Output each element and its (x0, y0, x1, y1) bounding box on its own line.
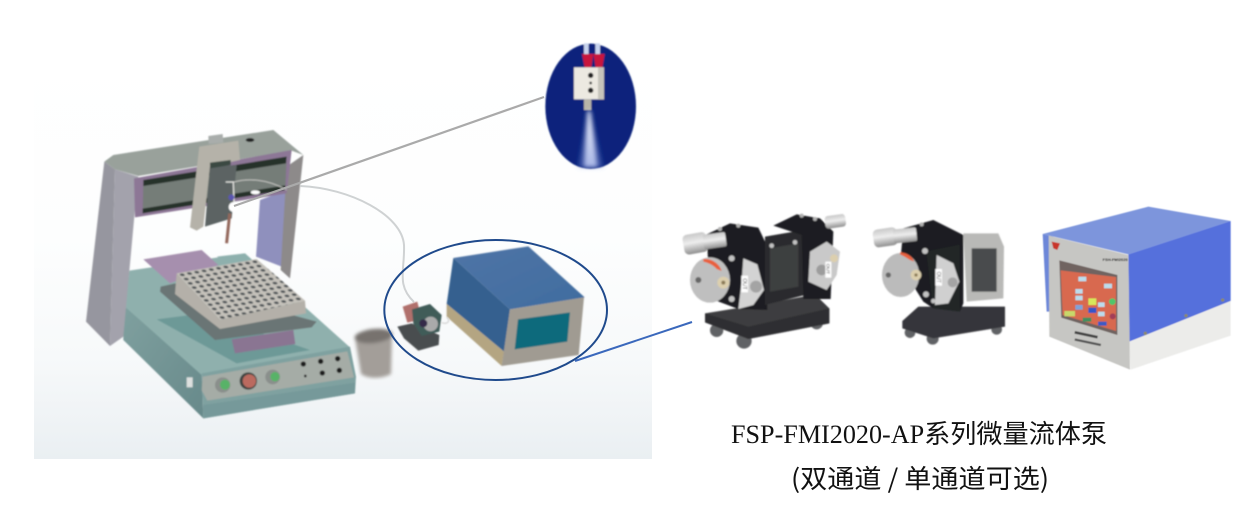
pump head left (690, 257, 764, 309)
waste cup (354, 327, 393, 378)
red fittings (582, 54, 605, 67)
dual channel pump (682, 214, 846, 349)
caption line 2: (双通道 / 单通道可选) (791, 459, 1049, 496)
pump and controller oval callout (384, 240, 607, 380)
valve body (574, 67, 604, 110)
control buttons (187, 356, 342, 393)
side screws (1144, 298, 1224, 335)
micrometer handle (872, 227, 917, 248)
pump base (902, 307, 1005, 345)
small pump (397, 302, 449, 351)
controller unit (1043, 207, 1231, 370)
work plate (160, 259, 317, 340)
leader line to nozzle detail (234, 97, 544, 206)
purple stage (143, 250, 295, 353)
controller front panel: FSH-FMI2020 (1103, 257, 1128, 262)
controller top and side (1043, 207, 1231, 370)
single channel pump (872, 220, 1005, 345)
dispensing head carriage (190, 134, 287, 243)
controller box (447, 246, 585, 366)
pump body (900, 220, 963, 312)
caption line 1: FSP-FMI2020-AP系列微量流体泵 (731, 420, 1107, 449)
nozzle detail oval (545, 43, 636, 169)
air tubes (584, 43, 600, 55)
pump head right (808, 242, 840, 290)
spray cone (578, 111, 603, 167)
gantry frame (86, 130, 303, 346)
controller front panel (1049, 236, 1130, 370)
touch screen (1059, 260, 1117, 335)
pump body (707, 214, 833, 310)
pump base (705, 297, 829, 349)
pump head right: OUT (825, 264, 831, 274)
background panel (34, 55, 652, 459)
machine base (123, 253, 356, 418)
pump head: OUT (935, 272, 941, 284)
panel labels (1074, 331, 1101, 346)
pump head left: OUT (741, 278, 747, 290)
leader line to pump products (575, 322, 692, 361)
tube from head to pump (300, 186, 414, 302)
dispensing machine (86, 130, 356, 418)
stepper motor (963, 233, 1004, 302)
callout ellipse (384, 240, 607, 380)
product caption (731, 420, 1107, 496)
micrometer handles (682, 214, 846, 255)
